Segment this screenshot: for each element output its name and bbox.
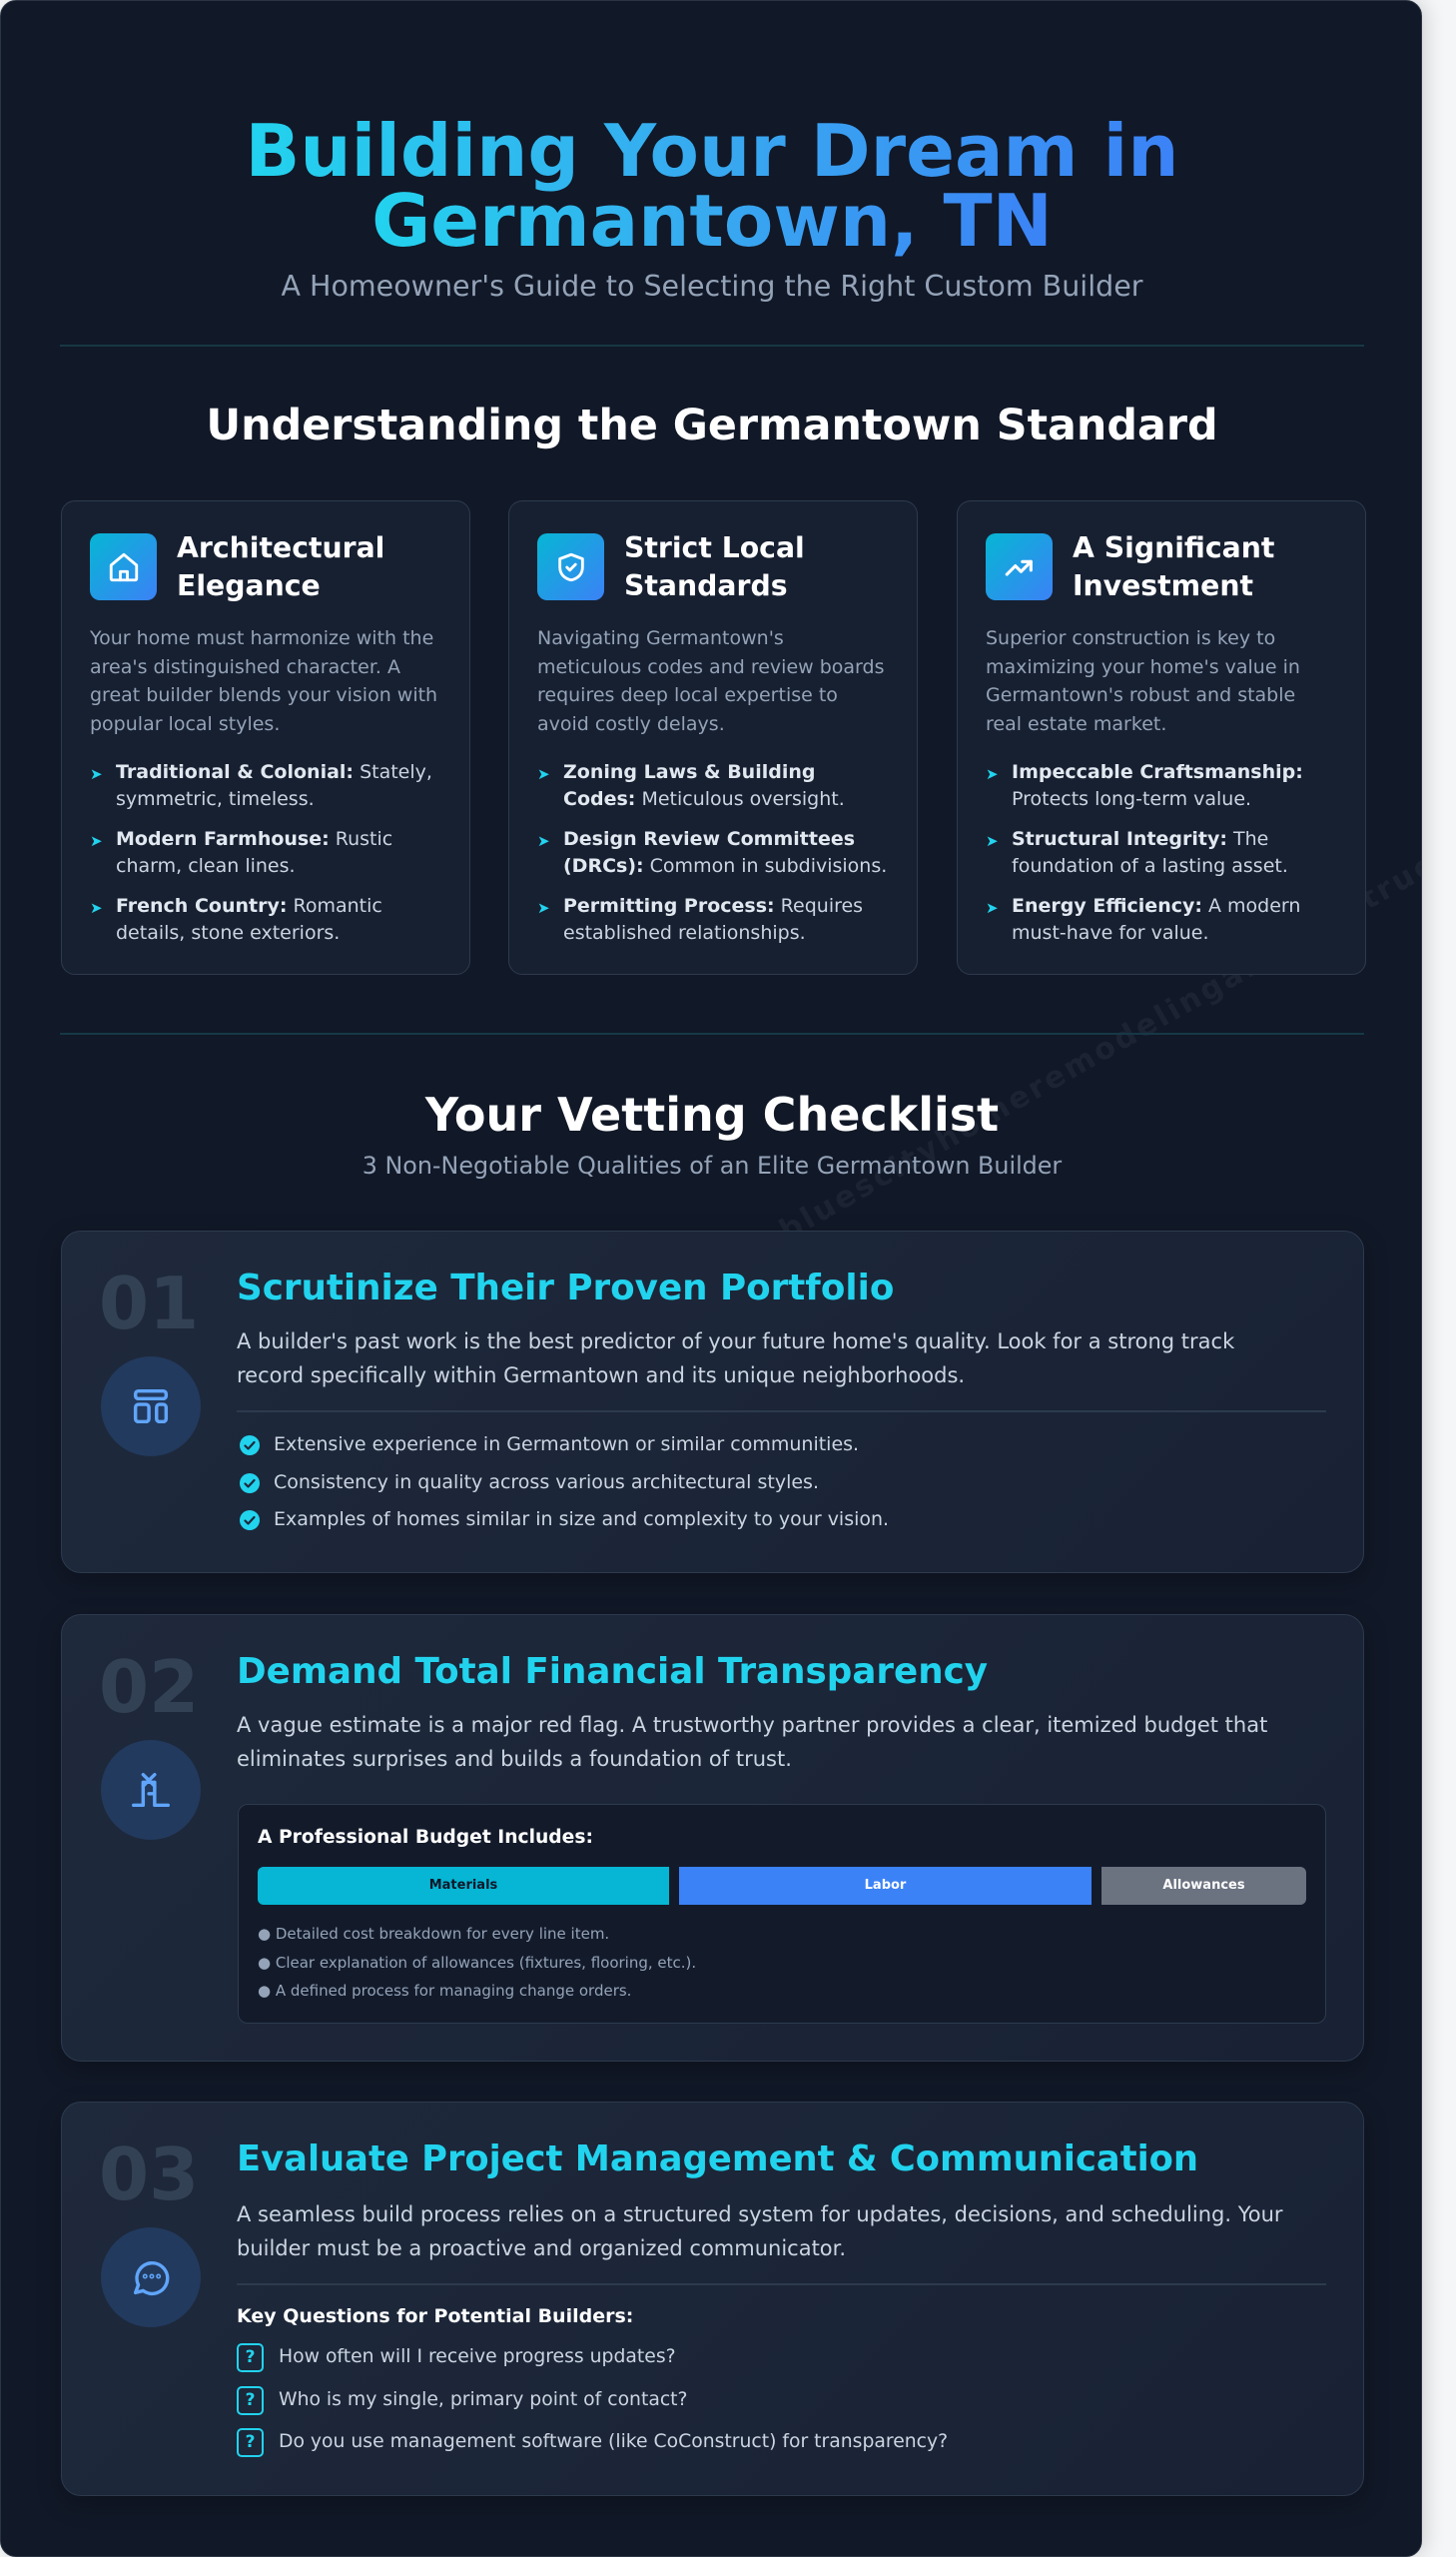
- number 02: 02: [99, 1645, 199, 1729]
- card title: Standards: [624, 569, 788, 602]
- card description: [90, 627, 437, 735]
- bullet list: Energy Efficiency: A modern: [1012, 895, 1300, 917]
- panel: 03 project management: [61, 2102, 1364, 2496]
- card title: [1073, 531, 1274, 602]
- bullet list: must-have for value.: [1012, 922, 1209, 944]
- bullet list: [539, 761, 887, 944]
- card description: Germantown's robust and stable: [986, 684, 1295, 706]
- bullet list: [987, 761, 1303, 944]
- card description: [537, 627, 884, 735]
- number 03: 03: [99, 2132, 199, 2216]
- card description: great builder blends your vision with: [90, 684, 437, 706]
- bullet list: Zoning Laws & Building: [563, 761, 815, 783]
- icon: layout: [101, 1356, 201, 1456]
- icon: chat: [101, 2227, 201, 2327]
- questions list: Do you use management software (like CoConstruct) for transparency?: [279, 2431, 948, 2452]
- panel: architectural elegance: [61, 500, 470, 975]
- bullet list: Codes: Meticulous oversight.: [563, 788, 845, 810]
- bullet list: Structural Integrity: The: [1012, 828, 1268, 850]
- budget box: [238, 1804, 1326, 2024]
- icon: shield: [537, 533, 604, 600]
- card description: Your home must harmonize with the: [90, 627, 433, 649]
- bullet list: French Country: Romantic: [116, 895, 382, 917]
- card title: [177, 531, 384, 602]
- stacked bar: Allowances: [1162, 1878, 1245, 1893]
- budget bullets: ● A defined process for managing change orders.: [258, 1982, 631, 2000]
- card title: [624, 531, 805, 602]
- questions list: ?: [246, 2389, 255, 2409]
- panel: strict local standards: [508, 500, 918, 975]
- panel: 02 financial transparency: [61, 1614, 1364, 2062]
- bullet list: Protects long-term value.: [1012, 788, 1251, 810]
- checklist: Consistency in quality across various architectural styles.: [274, 1470, 819, 1492]
- heading: vetting checklist: Your Vetting Checklist: [425, 1088, 999, 1142]
- questions list: ?: [246, 2347, 255, 2367]
- card title: Strict Local: [624, 531, 805, 564]
- paragraph: builder must be a proactive and organized communicator.: [237, 2236, 846, 2260]
- budget heading: A Professional Budget Includes:: [258, 1827, 593, 1848]
- card description: meticulous codes and review boards: [537, 655, 884, 677]
- bullet list: foundation of a lasting asset.: [1012, 855, 1288, 877]
- bullet list: Impeccable Craftsmanship:: [1012, 761, 1303, 783]
- checklist: Extensive experience in Germantown or similar communities.: [274, 1433, 859, 1455]
- bullet list: charm, clean lines.: [116, 855, 296, 877]
- paragraph: A vague estimate is a major red flag. A trustworthy partner provides a clear, itemized budget that: [237, 1713, 1267, 1737]
- panel: significant investment: [957, 500, 1366, 975]
- icon: budget: [101, 1740, 201, 1840]
- title: Building Your Dream in: [245, 109, 1179, 193]
- title: Germantown, TN: [371, 179, 1053, 263]
- card title: Architectural: [177, 531, 384, 564]
- questions list: Who is my single, primary point of contact?: [279, 2389, 687, 2409]
- card title: A Significant: [1073, 531, 1274, 564]
- stacked bar: Labor: [865, 1878, 906, 1893]
- icon: trending up: [986, 533, 1053, 600]
- card description: Superior construction is key to: [986, 627, 1275, 649]
- subtitle: A Homeowner's Guide to Selecting the Right Custom Builder: [282, 270, 1142, 303]
- card description: avoid costly delays.: [537, 713, 725, 735]
- bullet list: details, stone exteriors.: [116, 922, 340, 944]
- checklist: [240, 1433, 889, 1530]
- stacked bar: Materials: [429, 1878, 497, 1893]
- paragraph: record specifically within Germantown and its unique neighborhoods.: [237, 1363, 965, 1387]
- paragraph: A builder's past work is the best predictor of your future home's quality. Look for a strong track: [237, 1329, 1234, 1353]
- questions list: [237, 2343, 948, 2457]
- card description: Navigating Germantown's: [537, 627, 784, 649]
- budget bullets: ● Clear explanation of allowances (fixtures, flooring, etc.).: [258, 1954, 696, 1972]
- bullet list: Traditional & Colonial: Stately,: [116, 761, 432, 783]
- paragraph: [237, 2202, 1283, 2260]
- budget bullets: ● Detailed cost breakdown for every line item.: [258, 1925, 609, 1943]
- heading: understanding the standard: Understanding the Germantown Standard: [206, 401, 1218, 450]
- card description: area's distinguished character. A: [90, 655, 400, 677]
- paragraph: eliminates surprises and builds a foundation of trust.: [237, 1747, 792, 1771]
- card description: real estate market.: [986, 713, 1166, 735]
- card title: Investment: [1073, 569, 1253, 602]
- title: Demand Total Financial Transparency: [237, 1651, 988, 1692]
- subheading: 3 Non-Negotiable Qualities of an Elite Germantown Builder: [363, 1152, 1062, 1180]
- card description: [986, 627, 1300, 735]
- card description: requires deep local expertise to: [537, 684, 838, 706]
- bullet list: Design Review Committees: [563, 828, 855, 850]
- number 01: 01: [99, 1262, 199, 1345]
- bullet list: established relationships.: [563, 922, 806, 944]
- checklist: Examples of homes similar in size and complexity to your vision.: [274, 1508, 889, 1530]
- bullet list: (DRCs): Common in subdivisions.: [563, 855, 887, 877]
- bullet list: [92, 761, 432, 944]
- stacked bar: [258, 1867, 1306, 1905]
- questions list: How often will I receive progress updates?: [279, 2346, 676, 2367]
- icon: house: [90, 533, 157, 600]
- bullet list: Permitting Process: Requires: [563, 895, 863, 917]
- card title: Elegance: [177, 569, 321, 602]
- card description: popular local styles.: [90, 713, 280, 735]
- paragraph: [237, 1713, 1267, 1771]
- budget bullets: [258, 1925, 696, 2000]
- title: [245, 109, 1179, 263]
- bullet list: Modern Farmhouse: Rustic: [116, 828, 392, 850]
- questions list: ?: [246, 2432, 255, 2452]
- card description: maximizing your home's value in: [986, 655, 1300, 677]
- paragraph: A seamless build process relies on a structured system for updates, decisions, and scheduling. Your: [237, 2202, 1283, 2226]
- key questions heading: Key Questions for Potential Builders:: [237, 2305, 633, 2327]
- title: Scrutinize Their Proven Portfolio: [237, 1268, 894, 1308]
- panel: 01 portfolio: [61, 1231, 1364, 1573]
- paragraph: [237, 1329, 1234, 1387]
- bullet list: symmetric, timeless.: [116, 788, 315, 810]
- title: Evaluate Project Management & Communication: [237, 2138, 1198, 2179]
